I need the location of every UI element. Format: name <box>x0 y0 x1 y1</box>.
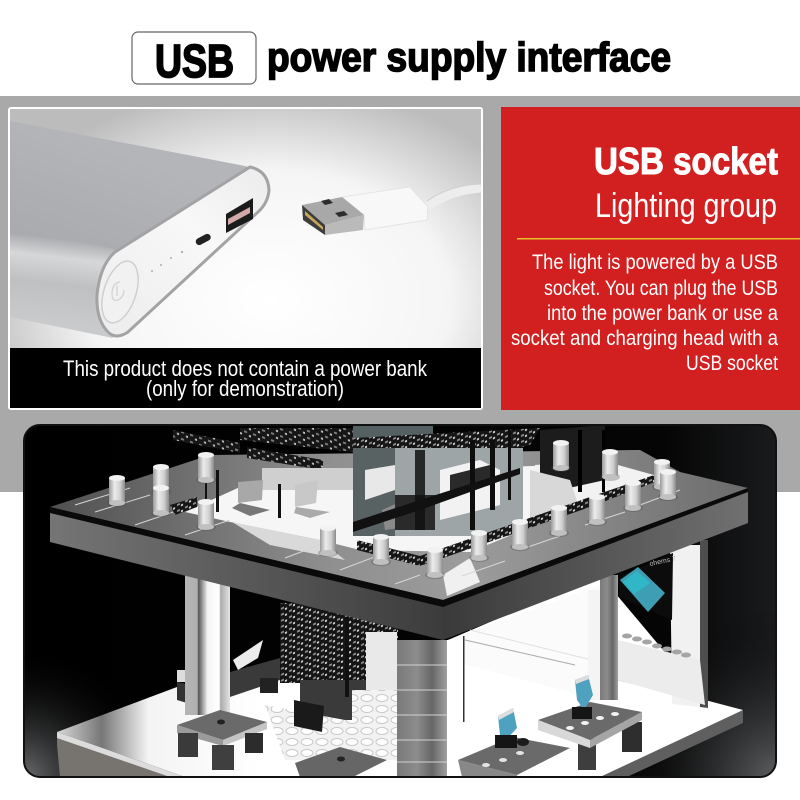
display table: phone stand left <box>458 708 570 777</box>
floor lip left <box>57 732 185 777</box>
USB port <box>226 198 253 233</box>
building panel border <box>24 425 776 777</box>
title <box>132 32 671 87</box>
right rooms <box>535 464 654 481</box>
interior: back lattice and rooms <box>170 425 665 566</box>
phone <box>572 675 593 719</box>
body text: USB socket <box>686 352 778 375</box>
title badge: USB: USB <box>155 35 234 87</box>
floor lip right <box>600 710 743 777</box>
column: centre <box>397 636 464 777</box>
back wall of left room <box>262 468 353 490</box>
caption bar: (only for demonstration) <box>146 376 344 401</box>
display table: phone stand right <box>538 675 642 770</box>
panel: power bank photo <box>8 107 483 410</box>
ground floor <box>57 575 743 777</box>
upper wall centre <box>353 426 433 438</box>
display table: front left <box>177 710 267 770</box>
dark stair section <box>265 603 398 760</box>
micro USB port <box>195 233 212 246</box>
caption bar: This product does not contain a power bank <box>63 356 428 381</box>
laptop displays left <box>238 480 263 503</box>
front lattice rail <box>357 473 660 566</box>
photo backdrop <box>10 109 481 349</box>
display table: front centre <box>295 747 387 777</box>
central glass room <box>353 430 523 536</box>
upper slab <box>50 450 748 640</box>
caption bar <box>10 348 481 408</box>
grey background band <box>0 96 800 492</box>
upper lattice left <box>240 428 353 452</box>
charge level dots <box>151 251 183 272</box>
column: left <box>185 575 230 715</box>
wall studs <box>622 634 691 658</box>
column: right and back wall <box>588 540 708 708</box>
back wall <box>448 638 452 640</box>
phone <box>495 708 517 748</box>
poster with phone: ohems 7 <box>649 556 677 568</box>
power button <box>95 257 145 327</box>
heading: USB socket <box>594 141 778 183</box>
poster with phone <box>618 553 677 620</box>
bench with book <box>177 640 280 703</box>
white room floor <box>185 466 535 552</box>
power bank end face <box>97 167 269 336</box>
stud posts <box>107 440 678 579</box>
icon: power bank <box>10 121 269 338</box>
body text <box>511 251 778 375</box>
panel: illuminated building photo <box>24 425 776 777</box>
icon: USB cable plug <box>302 184 481 235</box>
title text: power supply interface <box>267 34 671 80</box>
panel: USB socket description <box>501 107 800 410</box>
